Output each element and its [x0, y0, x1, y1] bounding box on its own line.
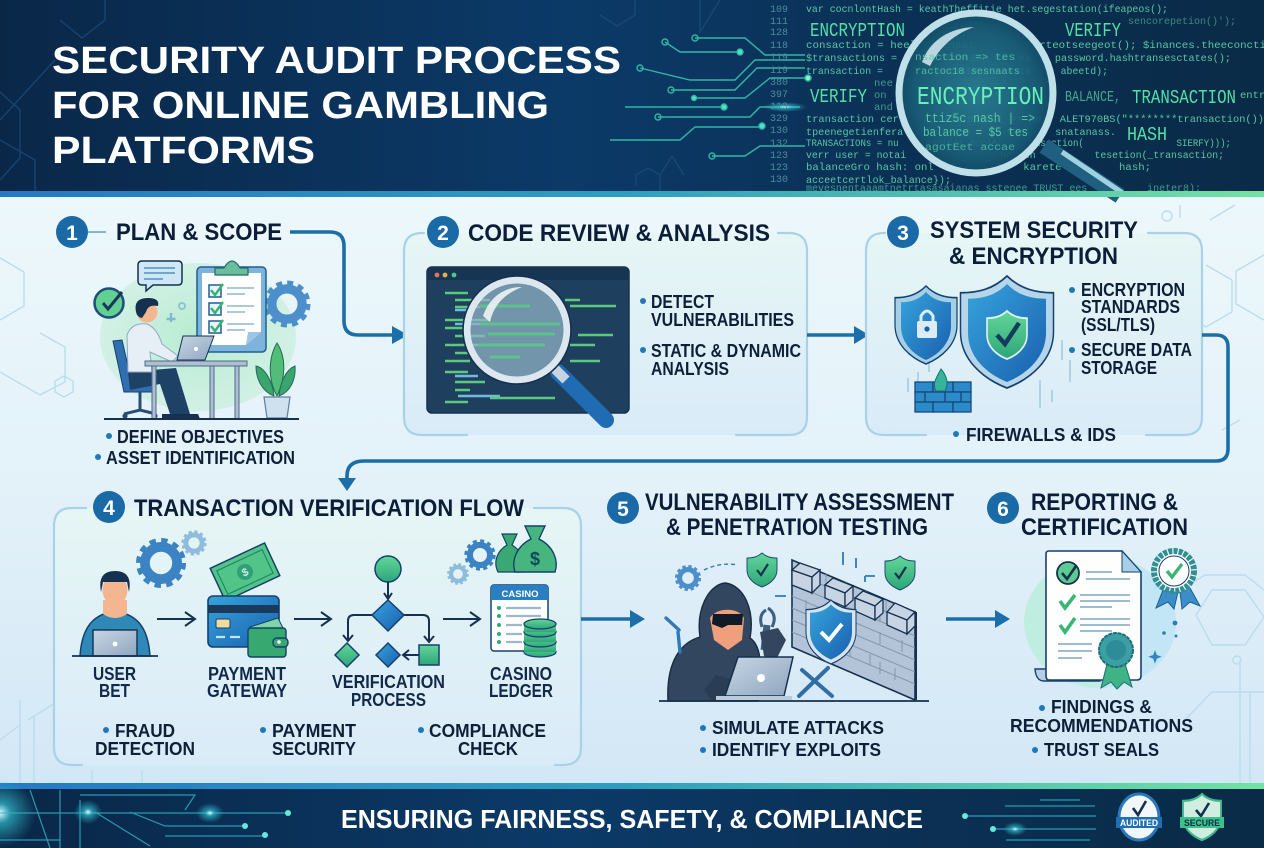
badge 2: 2: [437, 222, 449, 245]
node labels: PROCESS: [351, 690, 426, 710]
bullets step 3: SECURE DATA: [1081, 340, 1192, 360]
badge 6: [987, 492, 1019, 524]
step 6: reporting and certification: [987, 489, 1200, 760]
step 1: plan and scope: [56, 216, 308, 468]
payment gateway icon: $: [240, 566, 251, 580]
heading 5: [645, 489, 954, 541]
magnifying glass: [899, 13, 1124, 196]
code listing: TRANSACTION: [1132, 87, 1236, 109]
badge: audited: AUDITED: [1120, 818, 1158, 829]
header accent stripe: [0, 191, 1264, 197]
right circuit glow: [962, 800, 1096, 840]
badge: secure: SECURE: [1184, 818, 1220, 829]
document: [1046, 551, 1141, 680]
laptop: [177, 336, 214, 360]
badge: secure: [1180, 794, 1224, 840]
magnifying glass: ractoc18 sesnaats: [915, 66, 1020, 78]
title: SECURITY AUDIT PROCESS: [52, 40, 621, 82]
code listing: 109: [770, 5, 788, 16]
bullets step 6: TRUST SEALS: [1044, 740, 1159, 760]
casino ledger icon: $: [530, 549, 540, 569]
base curl: [1035, 669, 1100, 681]
title: PLATFORMS: [52, 130, 315, 172]
chair: [113, 340, 158, 419]
badge 3: 3: [897, 222, 909, 245]
gears: [139, 532, 205, 585]
code listing: 119: [770, 102, 788, 113]
node labels: [93, 664, 553, 710]
verification flowchart icon: [335, 556, 439, 667]
code listing: transaction cer ttiz5c nash | => pop ALET970BS("********transaction()): [806, 114, 1264, 126]
bullets step 1: DEFINE OBJECTIVES: [117, 427, 284, 447]
bullets step 2: VULNERABILITIES: [651, 310, 794, 330]
heading 6: [1021, 489, 1188, 541]
step 5: vulnerability assessment: [607, 489, 954, 760]
badge 3: [887, 216, 919, 248]
heading 1: PLAN & SCOPE: [116, 219, 282, 246]
illustration: certificate: [1024, 551, 1200, 689]
circuit traces: [610, 35, 811, 159]
title: FOR ONLINE GAMBLING: [52, 85, 549, 127]
badge 4: 4: [103, 497, 115, 520]
magnifying glass: agotEet accae: [925, 142, 1015, 154]
code listing: nee: [874, 78, 893, 90]
code listing: 123: [770, 163, 788, 174]
badge 5: 5: [617, 498, 629, 521]
code listing: 132: [770, 139, 788, 150]
footer tagline: ENSURING FAIRNESS, SAFETY, & COMPLIANCE: [341, 804, 923, 834]
bullets step 3: (SSL/TLS): [1081, 315, 1155, 335]
laptop: [716, 657, 793, 700]
gear: [677, 567, 699, 589]
bullets step 4: FRAUD: [115, 721, 175, 741]
code listing: [770, 4, 1264, 195]
ground line: [104, 418, 299, 420]
clipboard: [197, 261, 266, 352]
heading 6: CERTIFICATION: [1021, 514, 1188, 541]
bullets step 4: [95, 721, 546, 759]
code listing: verr user = notai noopen tesetion(_transaction;: [806, 150, 1224, 162]
node labels: PAYMENT: [208, 664, 286, 684]
badge 6: 6: [997, 498, 1009, 521]
code listing: 119: [770, 53, 788, 64]
code listing: HASH: [1127, 124, 1167, 146]
code listing: transaction = ractoc18 sesnaats abeetd);: [806, 66, 1108, 78]
code listing: 128: [770, 28, 788, 39]
illustration: hacker and firewall: [659, 552, 929, 701]
arrow: step 2 to step 3: [807, 326, 869, 344]
code listing: BALANCE,: [1065, 89, 1121, 106]
heading 3: & ENCRYPTION: [949, 243, 1118, 270]
small shields: [747, 553, 915, 590]
screwdriver: [666, 618, 680, 652]
bullets step 4: SECURITY: [272, 739, 356, 759]
shields and firewall: [895, 276, 1070, 412]
badge 2: [427, 216, 459, 248]
bullets step 1: [95, 427, 295, 468]
heading 6: REPORTING &: [1031, 489, 1178, 516]
main background: [0, 190, 1264, 790]
wall shield: [806, 600, 856, 664]
code listing: 118: [770, 41, 788, 52]
footer banner: [0, 779, 1264, 848]
seal: [1099, 633, 1133, 689]
code listing: 130: [770, 126, 788, 137]
code listing: 111: [770, 17, 788, 28]
code listing: VERIFY: [810, 86, 867, 108]
large shield with check: [960, 276, 1054, 388]
code listing: 380: [770, 78, 788, 89]
bullets step 6: RECOMMENDATIONS: [1010, 716, 1193, 736]
code listing: var cocnlontHash = keathTheffitie het.segestation(ifeapeos();: [806, 4, 1168, 16]
heading 3: [930, 217, 1138, 270]
ground: [659, 700, 929, 702]
heading 2: CODE REVIEW & ANALYSIS: [468, 220, 770, 247]
badge 1: 1: [66, 222, 78, 245]
node labels: GATEWAY: [207, 681, 287, 701]
casino ledger icon: [448, 526, 556, 657]
code window with magnifier: [427, 267, 629, 420]
bullets step 6: FINDINGS &: [1051, 697, 1152, 717]
code listing: 123: [770, 151, 788, 162]
node labels: VERIFICATION: [332, 672, 445, 692]
magnifying glass: ttiz5c nash | =>: [925, 111, 1035, 126]
code listing: 130: [770, 175, 788, 186]
person: [127, 298, 200, 419]
bullets step 5: [700, 718, 884, 760]
small shield with lock: [895, 286, 957, 364]
header decorative hexagons: [0, 0, 720, 191]
checks: [1057, 562, 1079, 632]
crossed tools: [799, 668, 832, 696]
arrow a: [157, 612, 195, 626]
code listing: and: [874, 102, 893, 114]
magnifying glass: balance = $5 tes: [923, 125, 1028, 140]
arrow: step 4 to step 5: [581, 610, 645, 628]
node labels: BET: [99, 681, 130, 701]
wrench: [760, 608, 786, 660]
bullets step 3: FIREWALLS & IDS: [966, 425, 1116, 445]
user icon: [72, 571, 158, 656]
bullets step 3: STORAGE: [1081, 358, 1157, 378]
code listing: $transactions = nsaction => tes password.hashtransesctates();: [806, 53, 1231, 65]
heading 3: SYSTEM SECURITY: [930, 217, 1138, 244]
footer stripe: [0, 783, 1264, 789]
code listing: consaction = heelt vensa: rteotseegeot(); $inances.theeconcti: [806, 40, 1264, 52]
payment gateway icon: [208, 543, 288, 657]
gear: [266, 283, 308, 325]
magnifier: [463, 276, 606, 420]
node labels: USER: [93, 664, 136, 684]
code listing: sencorepetion()');: [1128, 16, 1236, 28]
code listing: 119: [770, 66, 788, 77]
casino ledger icon: CASINO: [502, 589, 538, 600]
code listing: ENCRYPTION: [810, 20, 905, 42]
code listing: on: [874, 90, 887, 102]
arrow b: [294, 612, 331, 626]
brick wall: [792, 560, 917, 700]
code listing: tpeenegetienfera balance = $5 tesl snatanass.: [806, 127, 1116, 139]
node labels: LEDGER: [489, 681, 553, 701]
arrow: step 1 to step 2: [290, 232, 408, 344]
bullets step 4: CHECK: [458, 739, 518, 759]
heading 5: & PENETRATION TESTING: [666, 514, 928, 541]
badge 1: [56, 216, 88, 248]
bullets step 4: PAYMENT: [272, 721, 356, 741]
background hexagon network: [0, 205, 1264, 783]
code listing: VERIFY: [1065, 20, 1121, 42]
left circuit glow: [0, 779, 291, 848]
code listing: balanceGro hash: onl karete hash;: [806, 162, 1151, 174]
badge 5: [607, 492, 639, 524]
bullets step 1: ASSET IDENTIFICATION: [106, 448, 295, 468]
flame: [934, 369, 947, 391]
panel 4: transaction verification flow: [54, 491, 581, 765]
bullets step 5: IDENTIFY EXPLOITS: [712, 740, 881, 760]
code listing: mevesnentaaamtnetrtasasaianas sstenee TRUST ees ineter8);: [806, 183, 1201, 195]
heading 5: VULNERABILITY ASSESSMENT: [645, 489, 954, 516]
bullets step 2: ANALYSIS: [651, 359, 729, 379]
desk: [145, 361, 247, 419]
code listing: acceetcertlok_balance});: [806, 175, 951, 187]
magnifying glass: nsaction => tes: [915, 52, 1015, 64]
hacker: [668, 583, 760, 701]
node labels: CASINO: [490, 664, 552, 684]
medal: [1154, 551, 1200, 609]
bullets step 6: [1010, 697, 1193, 760]
magnifying glass: ENCRYPTION: [917, 82, 1044, 112]
panel 2: code review and analysis: [404, 216, 807, 435]
check bubble: [94, 288, 124, 318]
arrow c: [443, 612, 480, 626]
bullets step 4: COMPLIANCE: [429, 721, 546, 741]
bullets step 3: [953, 280, 1192, 445]
code listing: 329: [770, 114, 788, 125]
badge: audited: [1116, 794, 1162, 840]
title: [52, 40, 621, 172]
bullets step 2: STATIC & DYNAMIC: [651, 341, 801, 361]
header banner: [0, 0, 1264, 196]
panel 3: system security and encryption: [866, 216, 1202, 445]
potted plant: [256, 343, 295, 418]
firewall: [915, 382, 971, 412]
arrow: step 5 to step 6: [946, 610, 1010, 628]
bullets step 5: SIMULATE ATTACKS: [712, 718, 884, 738]
bullets step 3: STANDARDS: [1081, 297, 1180, 317]
arrow: step 3 to step 4: [338, 335, 1228, 491]
bullets step 2: [640, 292, 801, 379]
speech bubble: [138, 261, 182, 291]
bullets step 3: ENCRYPTION: [1081, 280, 1185, 300]
bullets step 4: DETECTION: [95, 739, 195, 759]
code listing: 397: [770, 90, 788, 101]
heading 4: TRANSACTION VERIFICATION FLOW: [134, 495, 524, 522]
bullets step 2: DETECT: [651, 292, 714, 312]
illustration: person at desk: [94, 261, 308, 419]
badge 4: [93, 491, 125, 523]
